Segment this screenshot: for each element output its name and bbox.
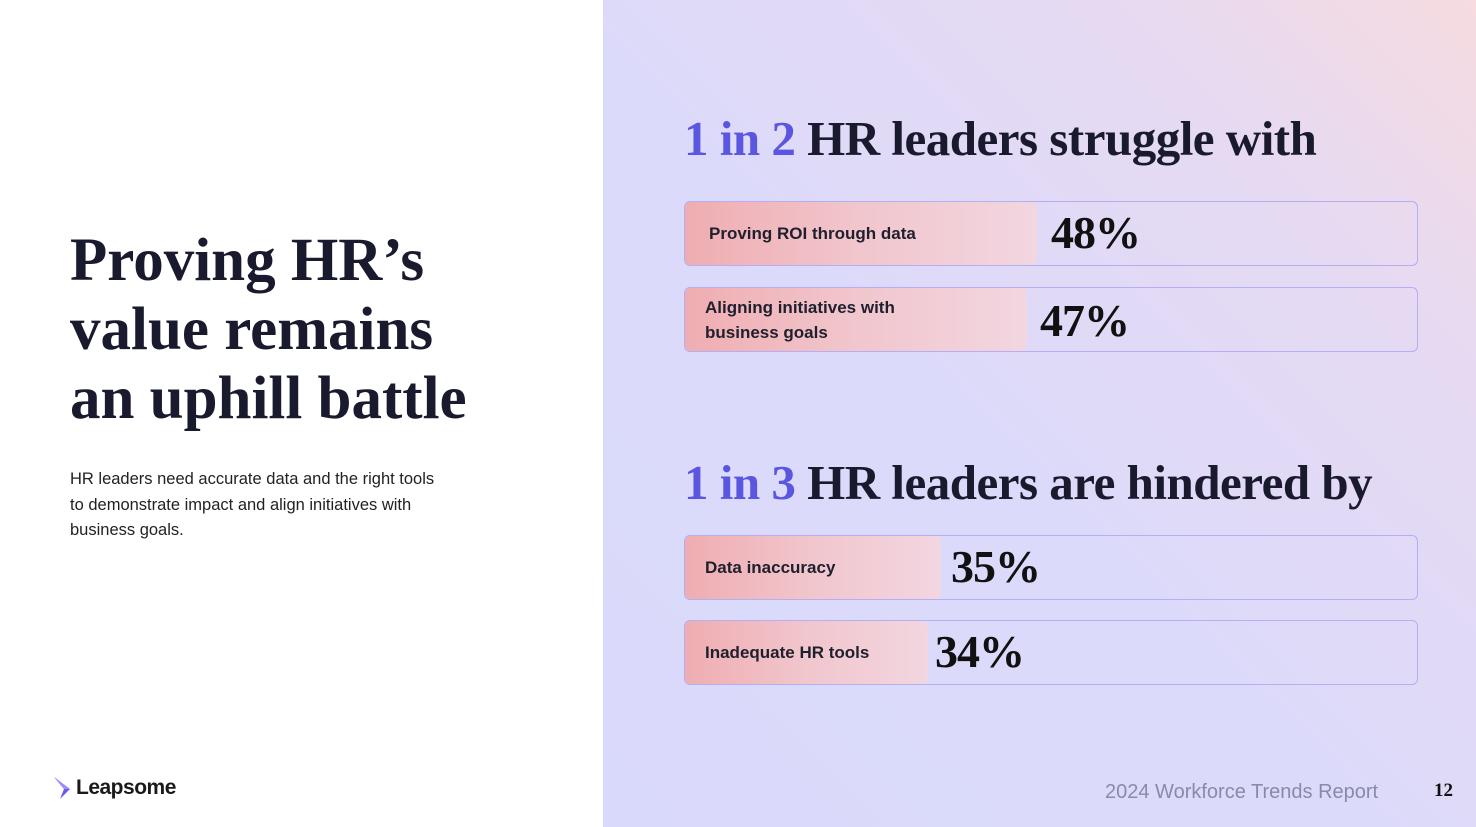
title: an uphill battle xyxy=(70,365,467,432)
logo: Leapsome xyxy=(76,776,176,799)
body text: to demonstrate impact and align initiatives with xyxy=(70,496,411,514)
heading 1: 1 in 2 HR leaders struggle with xyxy=(684,111,1316,166)
title: Proving HR’s xyxy=(70,227,424,294)
bar: data inaccuracy: 35% xyxy=(951,541,1040,592)
body text: business goals. xyxy=(70,521,184,539)
body text xyxy=(70,470,434,539)
right panel xyxy=(603,0,1476,827)
bar: aligning: Aligning initiatives with xyxy=(705,298,895,316)
bar: proving ROI: 48% xyxy=(1051,207,1140,258)
bar: data inaccuracy: Data inaccuracy xyxy=(705,558,835,577)
title: value remains xyxy=(70,296,433,363)
bar: aligning: business goals xyxy=(705,322,828,342)
bar: aligning: 47% xyxy=(1040,295,1129,346)
heading 2: 1 in 3 HR leaders are hindered by xyxy=(684,455,1372,510)
bar: inadequate tools: 34% xyxy=(935,626,1024,677)
bar: proving ROI xyxy=(684,201,1418,266)
body text: HR leaders need accurate data and the right tools xyxy=(70,470,434,488)
title xyxy=(70,227,467,432)
bar: inadequate tools xyxy=(684,620,1418,685)
bar: inadequate tools: Inadequate HR tools xyxy=(705,643,869,662)
bar: aligning xyxy=(684,287,1418,352)
bar: proving ROI: Proving ROI through data xyxy=(709,224,916,243)
page number: 12 xyxy=(1434,780,1453,801)
footer: 2024 Workforce Trends Report xyxy=(1105,781,1378,803)
bar: data inaccuracy xyxy=(684,535,1418,600)
